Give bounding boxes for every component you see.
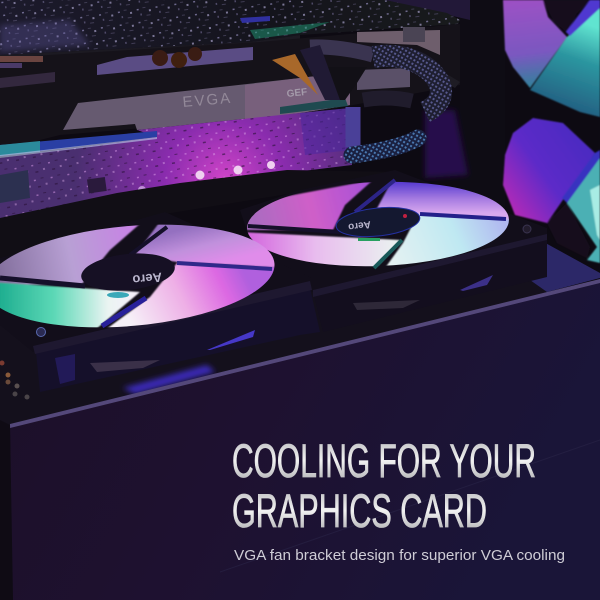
blades <box>0 224 274 328</box>
left fan <box>0 212 320 392</box>
braided cable <box>272 45 441 155</box>
spokes <box>248 180 506 268</box>
side fan bottom right <box>503 118 600 263</box>
side wall <box>313 234 547 332</box>
PCB speckles lower left <box>0 360 30 400</box>
dark slot rail behind fans <box>0 170 400 262</box>
right fan <box>247 172 547 310</box>
hub <box>79 249 177 298</box>
subtitle: VGA fan bracket design for superior VGA cooling <box>234 548 565 564</box>
heatsink and capacitors <box>0 24 460 150</box>
purple lit circuit board <box>0 108 352 220</box>
screw <box>523 225 531 233</box>
hub: Aero <box>132 270 163 288</box>
title: cooling for your graphics card <box>232 434 536 537</box>
case back wall <box>385 0 505 240</box>
case shroud front panel <box>0 279 600 600</box>
frame <box>240 170 547 292</box>
EVGA metal shroud: EVGA <box>182 90 233 111</box>
area below fans <box>0 235 547 428</box>
EVGA metal shroud <box>63 72 350 130</box>
EVGA metal shroud: GEF <box>286 87 308 100</box>
case shroud top surface <box>530 240 600 292</box>
graphics card circuit board top <box>0 0 460 62</box>
side wall <box>33 281 320 392</box>
screw <box>36 328 46 336</box>
lit glow beneath fan <box>123 365 215 394</box>
hub <box>335 204 421 241</box>
spokes <box>0 227 272 326</box>
hub: Aero <box>347 218 371 232</box>
side fan top right <box>503 0 600 117</box>
blades <box>247 182 509 266</box>
frame <box>0 212 312 352</box>
